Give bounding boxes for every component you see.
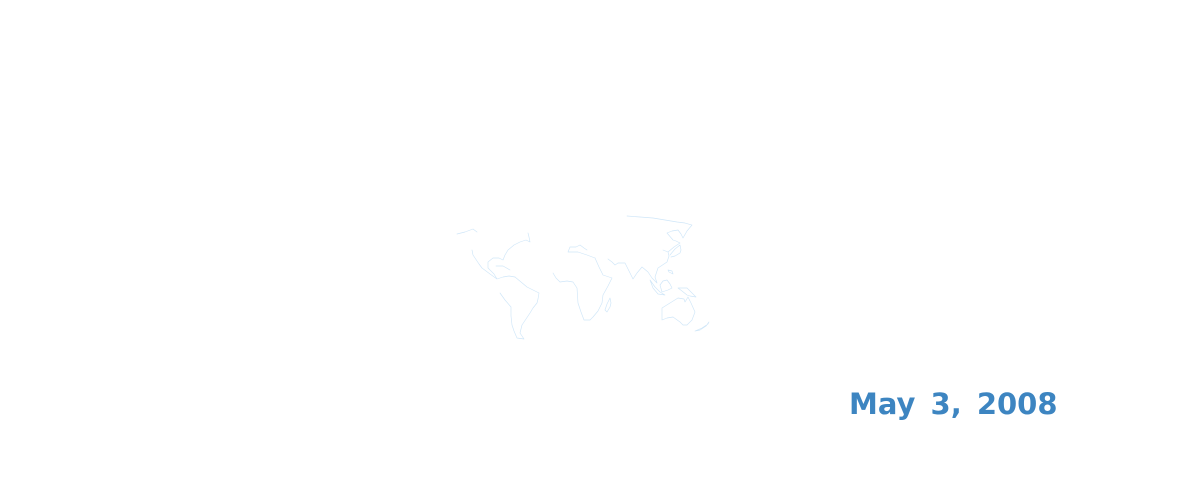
Asia coast — [608, 216, 692, 283]
Southeast Asia islands — [650, 270, 673, 295]
Mediterranean coast — [568, 245, 595, 258]
Australia — [662, 297, 695, 325]
Japan — [670, 245, 681, 257]
New Guinea — [678, 288, 696, 297]
date label: May 3, 2008 — [849, 387, 1058, 421]
North America coast — [457, 229, 530, 279]
world map outline — [457, 216, 709, 339]
South America coast — [500, 277, 539, 339]
Africa coast — [553, 258, 612, 320]
New Zealand — [695, 322, 709, 331]
Madagascar — [605, 298, 611, 312]
